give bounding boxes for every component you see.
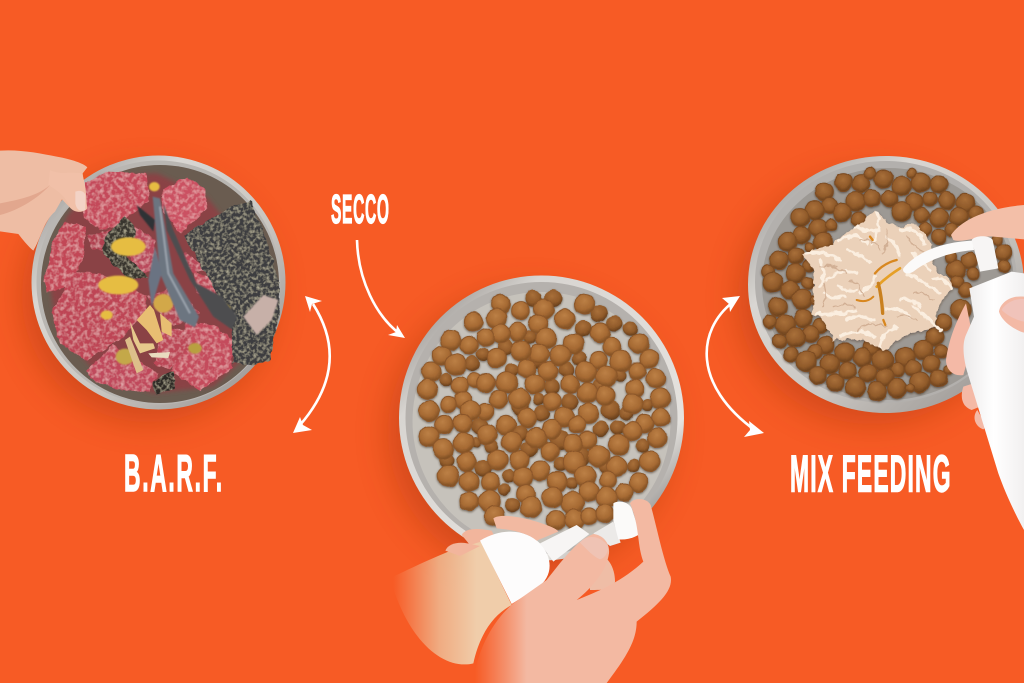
pale fleshy piece <box>243 295 278 335</box>
raw meat and toppings <box>44 172 280 394</box>
steel bowl <box>32 156 286 410</box>
bottle neck and body <box>964 272 1024 530</box>
heading: MIX FEEDING: MIX FEEDING <box>790 445 952 503</box>
fingers behind bottle <box>946 303 987 429</box>
top finger <box>951 205 1024 241</box>
thumb nail <box>580 537 608 559</box>
round bottle body <box>480 532 550 604</box>
hand squeezing bottle <box>390 499 671 683</box>
arrow: bowl B.A.R.F. double-headed <box>293 296 330 433</box>
panel: B.A.R.F. bowl <box>0 150 286 410</box>
beige bottle sleeve fading out <box>390 539 512 664</box>
hand and pump bottle <box>903 205 1024 530</box>
dark food bed <box>50 173 267 393</box>
panel: mix feeding bowl <box>748 156 1024 530</box>
orange sauce <box>857 237 900 325</box>
kibble <box>762 167 1012 400</box>
heading: SECCO: SECCO <box>331 186 390 232</box>
dried fish <box>137 197 237 329</box>
black seaweed chunk <box>103 202 280 394</box>
shadows under bowls <box>22 170 1006 574</box>
pump spout <box>903 241 974 273</box>
arrow: secco to bowl <box>357 240 405 338</box>
palm, thumb and pointer finger <box>473 499 671 683</box>
thumb <box>999 296 1024 333</box>
fingers behind bottle <box>445 529 615 590</box>
yellow powder <box>98 182 231 365</box>
shredded chicken <box>802 210 951 350</box>
arrow: mix feeding double-headed <box>707 296 764 437</box>
meat chunks <box>44 172 233 392</box>
kibble <box>417 290 670 529</box>
thumb nail <box>1002 299 1024 322</box>
steel bowl <box>399 276 684 560</box>
index finger <box>493 516 558 541</box>
heading: B.A.R.F.: B.A.R.F. <box>124 444 224 503</box>
panel: secco bowl <box>390 276 684 683</box>
pump head <box>972 236 998 272</box>
hand holding bowl <box>0 150 87 251</box>
pale shavings <box>125 305 172 373</box>
bottle cap and nozzle <box>540 502 640 562</box>
steel bowl <box>748 156 1024 413</box>
